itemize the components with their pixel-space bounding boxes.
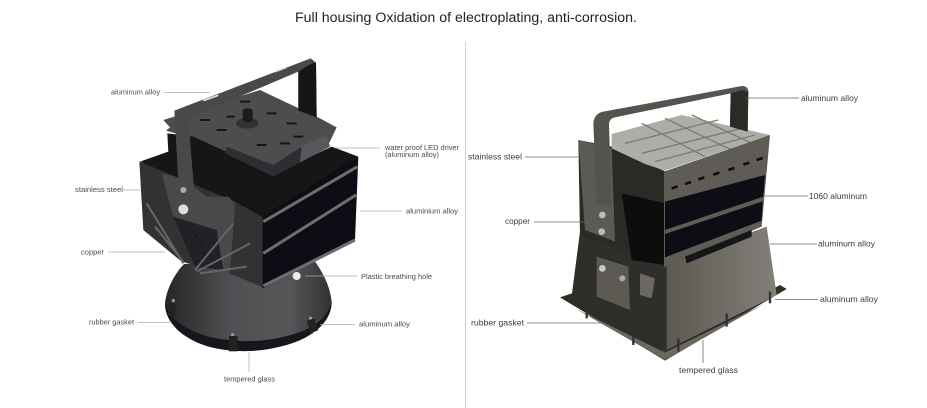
- top knob: [236, 118, 259, 129]
- fins: [665, 175, 765, 230]
- label: stainless steel (right): [468, 152, 578, 162]
- label: copper (right): [505, 216, 590, 226]
- fin face: [263, 157, 358, 288]
- flange clips: [587, 292, 770, 352]
- label: water proof LED driver: water proof LED driver: [384, 145, 460, 152]
- flange: [560, 285, 787, 361]
- label: water proof LED driver: (aluminum alloy): [385, 152, 439, 159]
- label: tempered glass (left): tempered glass: [224, 376, 276, 384]
- label: tempered glass (right): [679, 340, 738, 375]
- label: aluminum alloy (left top): [111, 90, 210, 96]
- label: tempered glass (right): tempered glass: [679, 365, 738, 375]
- label: tempered glass (left): [224, 352, 276, 384]
- label: stainless steel (left): stainless steel: [75, 187, 123, 194]
- label: copper (right): copper: [505, 216, 530, 226]
- label: aluminum alloy (right middle): [770, 238, 876, 248]
- label: Plastic breathing hole: Plastic breathing hole: [361, 274, 432, 281]
- upper left face: [578, 140, 666, 267]
- product: rectangular lamp: [560, 86, 787, 361]
- label: aluminum alloy (right top): [745, 93, 859, 103]
- label: stainless steel (right): stainless steel: [468, 152, 522, 162]
- label: aluminium alloy (left right side): aluminium alloy: [406, 208, 459, 216]
- label: 1060 aluminum: 1060 aluminum: [809, 191, 867, 201]
- label: water proof LED driver: [335, 145, 460, 159]
- label: aluminum alloy (right middle): aluminum alloy: [818, 238, 876, 248]
- plate underside front: [225, 147, 302, 177]
- label: aluminum alloy (right lower): [775, 294, 879, 304]
- dark heatsink top: [140, 133, 358, 222]
- label: aluminium alloy (left right side): [360, 208, 459, 216]
- divider: [464, 42, 466, 408]
- side bracket: [162, 173, 235, 273]
- label: Plastic breathing hole: [305, 274, 432, 281]
- handle: [593, 86, 748, 207]
- label: rubber gasket (right): [471, 318, 605, 328]
- left gray face: [139, 162, 265, 288]
- label: aluminum alloy (left bottom): [320, 322, 411, 328]
- handle bracket: [174, 58, 317, 188]
- bell reflector: [165, 258, 332, 351]
- label: 1060 aluminum: [765, 191, 867, 201]
- label: aluminum alloy (right top): aluminum alloy: [801, 93, 859, 103]
- label: rubber gasket (right): rubber gasket: [471, 318, 525, 328]
- lower box left face: [572, 232, 667, 352]
- label: copper (left): copper: [81, 250, 105, 256]
- cables: [147, 203, 250, 273]
- top LED modules: [612, 115, 770, 171]
- label: aluminum alloy (left top): aluminum alloy: [111, 90, 161, 96]
- top plate: [163, 90, 337, 177]
- lower box right face: [663, 227, 777, 352]
- label: copper (left): [81, 250, 165, 256]
- label: rubber gasket (left): rubber gasket: [89, 320, 134, 326]
- label: aluminum alloy (left bottom): aluminum alloy: [359, 322, 411, 328]
- plate slots: [200, 102, 303, 145]
- label: stainless steel (left): [75, 187, 140, 194]
- label: aluminum alloy (right lower): aluminum alloy: [820, 294, 879, 304]
- label: rubber gasket (left): [89, 320, 170, 326]
- product: round high bay lamp: [139, 58, 358, 351]
- title: Full housing Oxidation of electroplating, anti-corrosion.: [295, 10, 637, 25]
- upper right face and backing: [664, 135, 770, 267]
